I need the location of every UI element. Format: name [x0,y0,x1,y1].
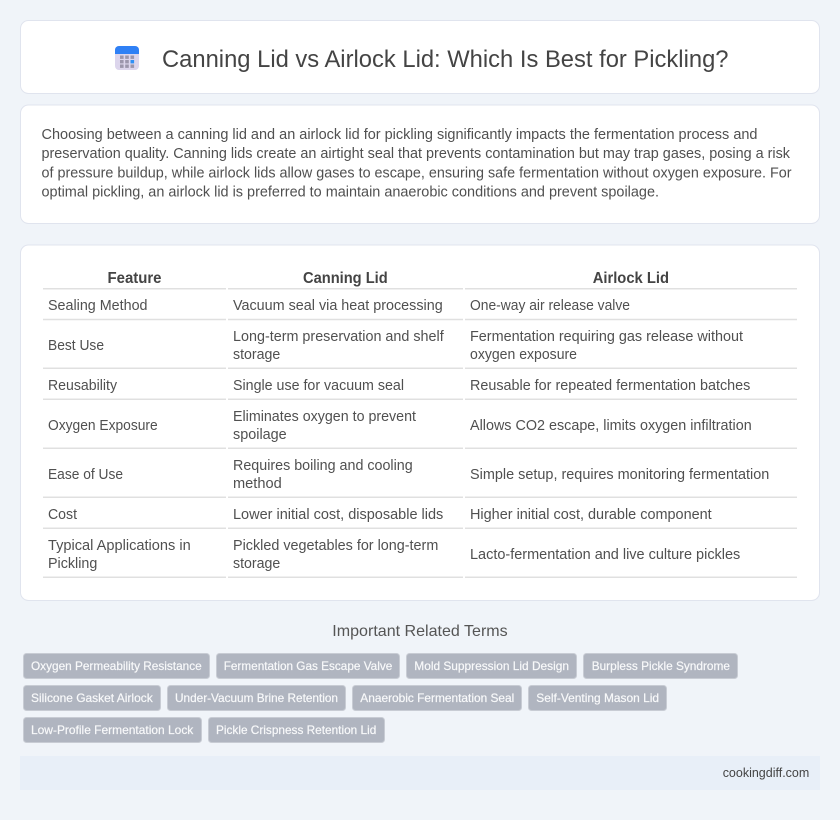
text block: introduction paragraph: preservation quality. Canning lids create an airtight seal that prevents contamination but may trap gases, posing a risk [42,146,791,162]
row: typical applications [48,538,740,572]
row: oxygen exposure: spoilage [233,427,287,443]
tags: related terms: Low-Profile Fermentation Lock [31,723,194,737]
footer [20,756,820,790]
tags: related terms: Oxygen Permeability Resistance [31,659,202,673]
tags: related terms: Under-Vacuum Brine Retention [175,691,338,705]
row: ease of use: Ease of Use [48,467,123,483]
row: best use: storage [233,347,280,363]
row: cost: Higher initial cost, durable component [470,507,712,523]
row: ease of use: Simple setup, requires monitoring fermentation [470,467,769,483]
table header row: Canning Lid [303,270,388,287]
text block: introduction paragraph: of pressure buildup, while airlock lids allow gases to escape, ensuring safe fermentation without oxygen exposure. For [42,166,792,182]
row: oxygen exposure [48,409,752,443]
heading: important related terms: Important Related Terms [332,623,508,640]
text block: introduction paragraph: optimal pickling, an airlock lid is preferred to maintain anaerobic conditions and prevent spoilage. [42,184,659,200]
tags: related terms: Fermentation Gas Escape Valve [224,659,393,673]
row: oxygen exposure: Allows CO2 escape, limits oxygen infiltration [470,418,752,434]
panel: introduction [20,105,820,224]
row: sealing method: Sealing Method [48,298,148,314]
title: Canning Lid vs Airlock Lid: Which Is Best for Pickling? [162,46,728,73]
row: oxygen exposure: Eliminates oxygen to prevent [233,409,416,425]
table header row [108,270,669,287]
tags: related terms: Pickle Crispness Retention Lid [216,723,376,737]
row: best use: Long-term preservation and shelf [233,329,445,345]
panel: header [20,20,820,94]
panel: comparison table [20,245,820,600]
footer: cookingdiff.com [723,765,809,780]
row: ease of use: method [233,476,282,492]
row: reusability: Single use for vacuum seal [233,378,404,394]
row: ease of use: Requires boiling and cooling [233,458,413,474]
row: typical applications: Typical Applications in [48,538,191,554]
row: typical applications: Pickled vegetables for long-term [233,538,438,554]
row: typical applications: Lacto-fermentation and live culture pickles [470,547,740,563]
table rules [43,289,797,577]
text block: introduction paragraph [42,127,792,200]
row: reusability: Reusable for repeated fermentation batches [470,378,750,394]
row: cost: Cost [48,507,77,523]
row: best use: Fermentation requiring gas release without [470,329,743,345]
tags: related terms: Mold Suppression Lid Design [414,659,569,673]
row: typical applications: storage [233,556,280,572]
row: reusability: Reusability [48,378,118,394]
row: sealing method [48,298,630,314]
row: typical applications: Pickling [48,556,97,572]
icon: calendar [115,46,139,70]
tags: related terms: Silicone Gasket Airlock [31,691,154,705]
row: ease of use [48,458,769,492]
table header row: Airlock Lid [593,270,669,287]
row: sealing method: Vacuum seal via heat processing [233,298,443,314]
row: sealing method: One-way air release valve [470,298,630,314]
row: cost: Lower initial cost, disposable lids [233,507,443,523]
row: reusability [48,378,750,394]
tags: related terms: Anaerobic Fermentation Seal [360,691,514,705]
row: cost [48,507,712,523]
row: best use: oxygen exposure [470,347,577,363]
tags: related terms: Self-Venting Mason Lid [536,691,659,705]
text block: introduction paragraph: Choosing between a canning lid and an airlock lid for pickling significantly impacts the fermentation process and [42,127,758,143]
tags: related terms [24,654,738,742]
table header row: Feature [108,270,162,287]
tags: related terms: Burpless Pickle Syndrome [592,659,730,673]
row: oxygen exposure: Oxygen Exposure [48,418,158,434]
row: best use: Best Use [48,338,104,354]
row: best use [48,329,743,363]
